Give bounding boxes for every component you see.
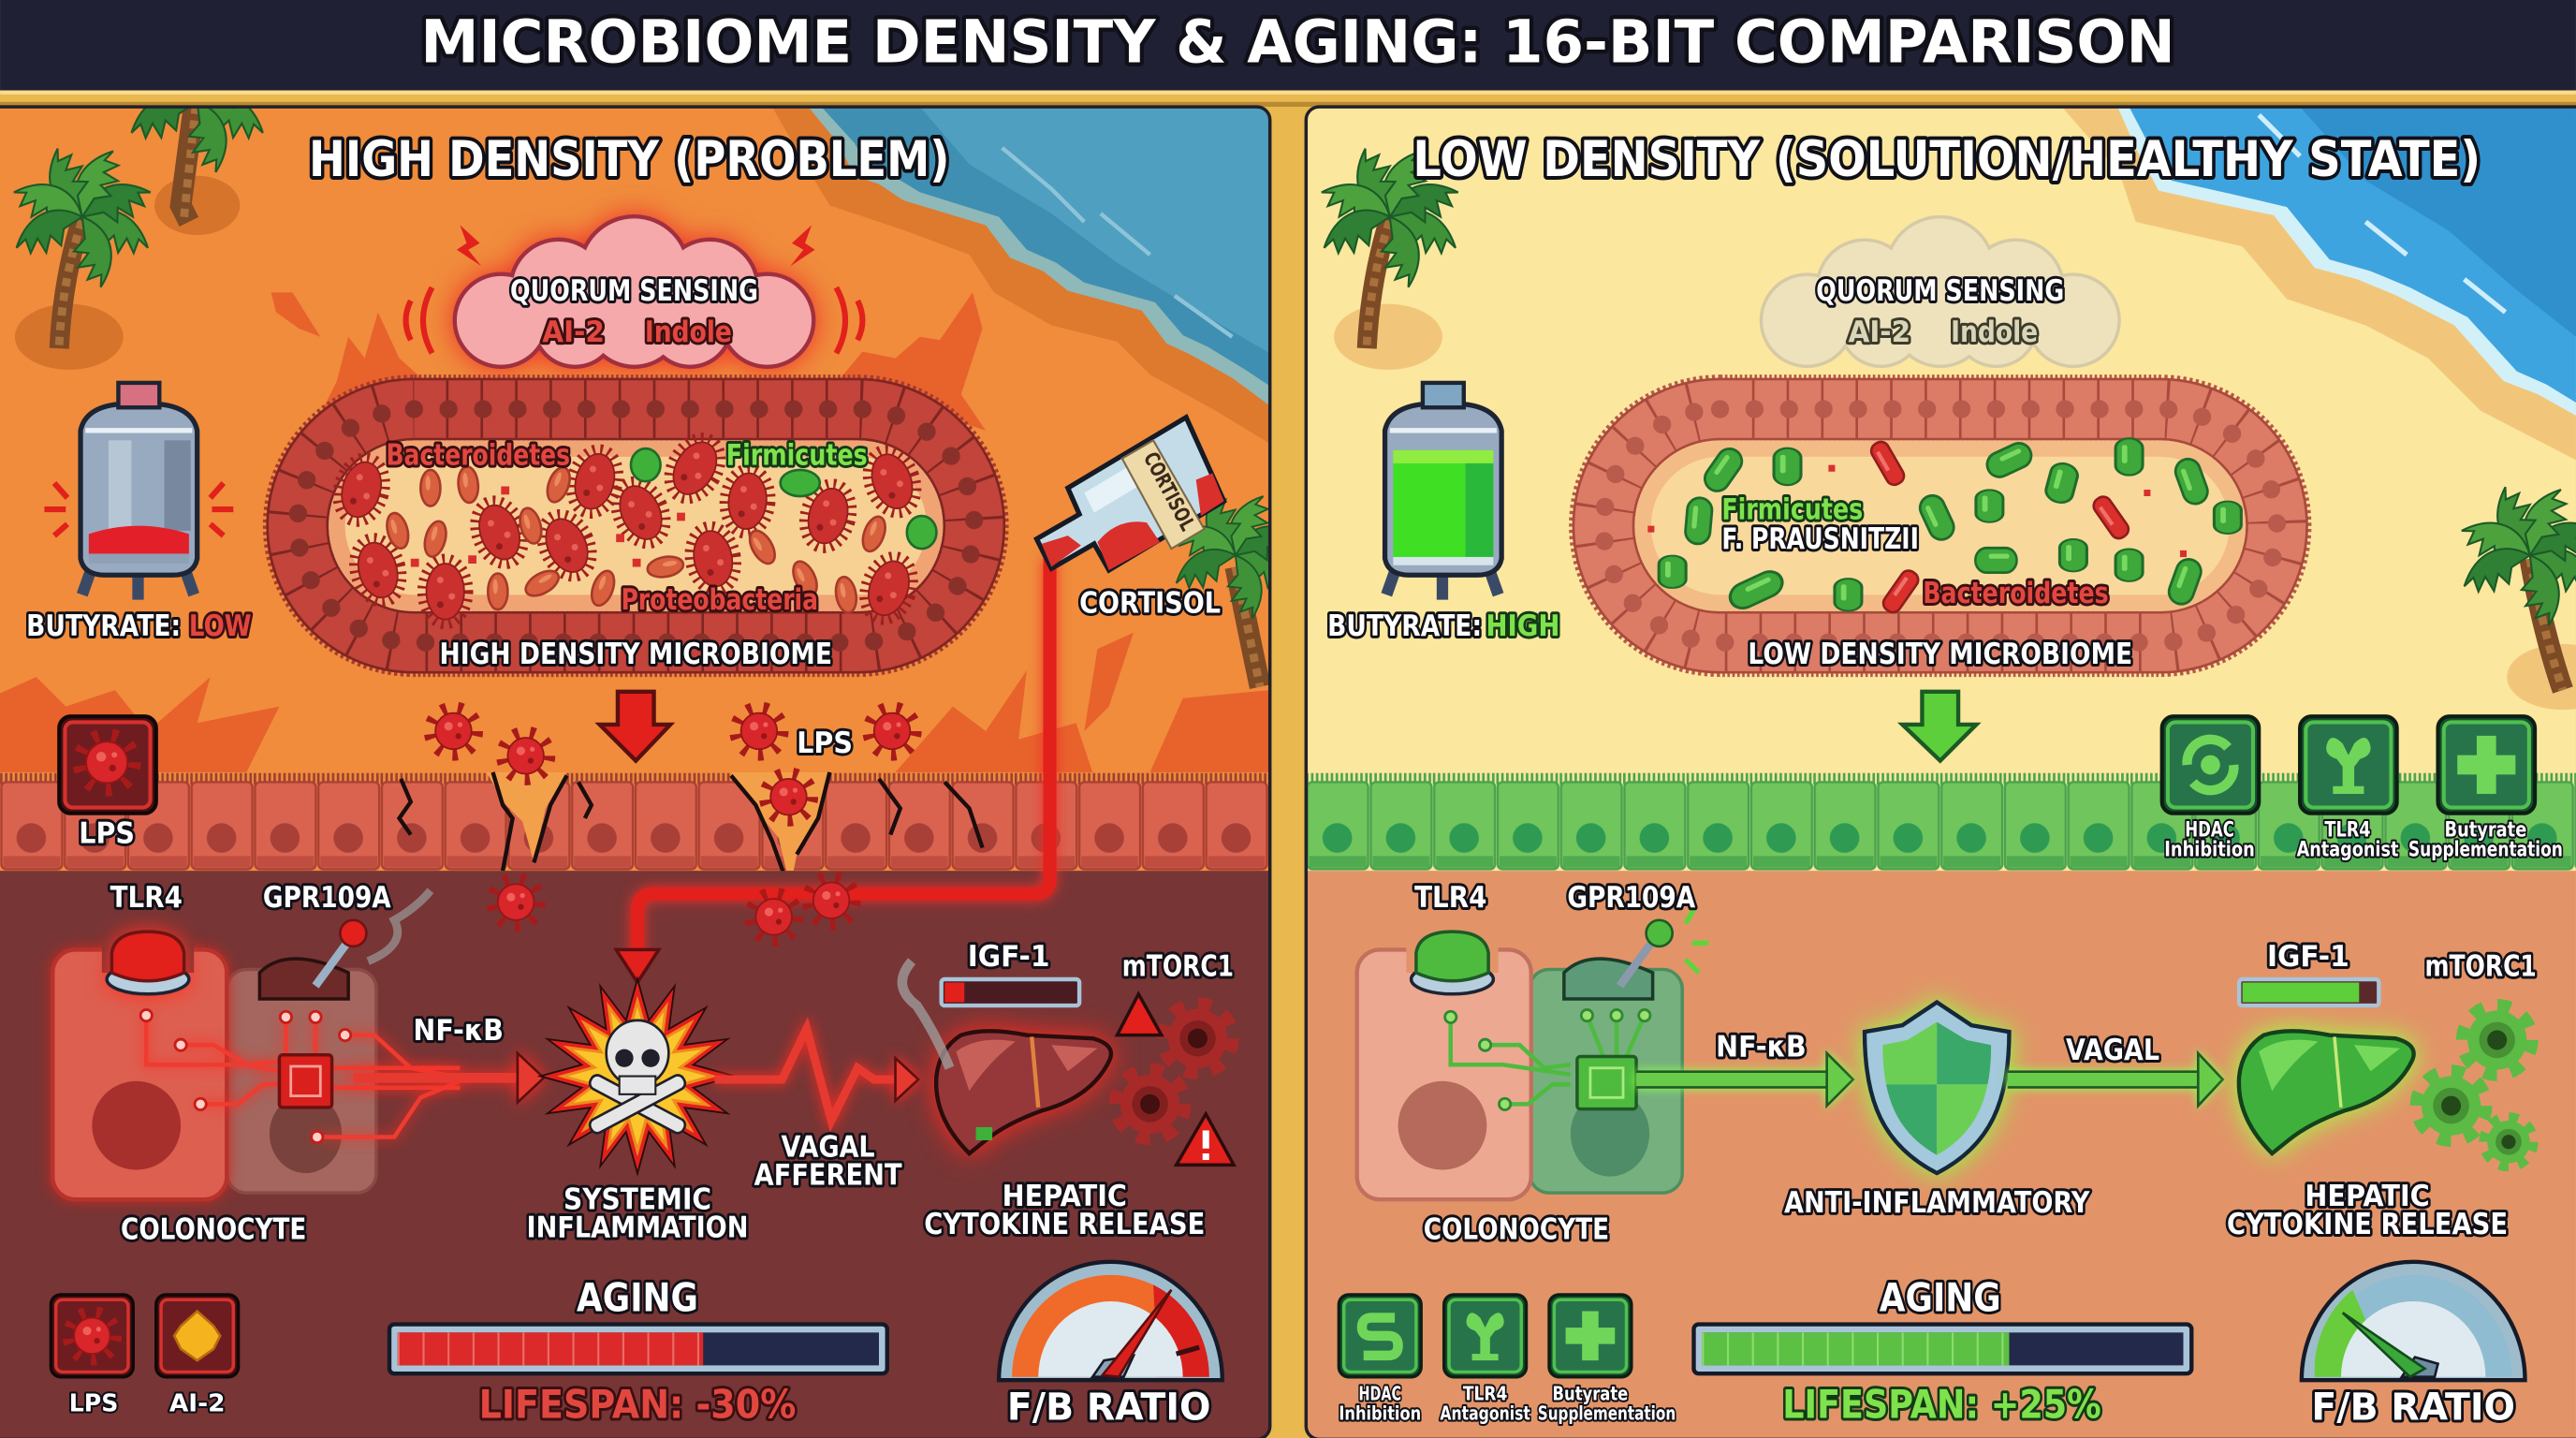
icon labels: Antagonist: [2297, 838, 2398, 861]
pipe arrow head: [616, 949, 659, 983]
icon labels: [2164, 818, 2563, 861]
cortisol pipe: [637, 559, 1050, 956]
hepatic label: CYTOKINE RELEASE: [924, 1208, 1205, 1241]
icon: tlr4: [1444, 1295, 1526, 1377]
quorum sensing cloud: AI-2: [542, 315, 605, 349]
quiet quorum sensing cloud: Indole: [1951, 315, 2038, 349]
peach tissue background: [1306, 871, 2576, 1438]
labels: TLR4: [110, 881, 183, 915]
explosion with skull: INFLAMMATION: [527, 1211, 748, 1245]
low density microbiome ring: Bacteroidetes: [1923, 577, 2109, 610]
vagal afferent label: [754, 1131, 902, 1192]
LPS icon box: [59, 716, 156, 850]
explosion with skull: SYSTEMIC: [564, 1183, 711, 1217]
signal circuits: [146, 1016, 460, 1137]
gpr109a lever: [1564, 907, 1708, 999]
panel title: HIGH DENSITY (PROBLEM): [309, 131, 949, 188]
signal arcs: [406, 287, 862, 353]
colonocyte pair: GPR109A: [263, 881, 391, 915]
gpr109a lever: [259, 920, 366, 999]
breach wedges: [487, 772, 567, 862]
sparse bacteria: [1647, 438, 2241, 615]
panel: low density (healthy): [1306, 107, 2576, 1438]
cortisol bottle: [1036, 418, 1224, 621]
tlr4 button: [1412, 932, 1493, 994]
cell: pink colonocyte: [1357, 949, 1531, 1199]
high density microbiome ring: Firmicutes: [726, 439, 868, 473]
icon labels: Butyrate: [2445, 818, 2526, 842]
icon: hdac: [1339, 1295, 1421, 1377]
bottom icons: lps and ai-2: AI-2: [169, 1389, 225, 1417]
hepatic label: [2227, 1180, 2508, 1241]
bacteria crowd: [331, 430, 936, 626]
aging bar: [1693, 1275, 2191, 1428]
lightning bolts: [457, 225, 815, 266]
cortisol bottle: CORTISOL: [1138, 448, 1199, 535]
liver smoke: [902, 961, 949, 1068]
vagal afferent pulse arrow: [714, 1029, 918, 1121]
icon labels: Inhibition: [1339, 1401, 1421, 1424]
hepatic label: [924, 1180, 1205, 1241]
igf-1 gauge: [2239, 940, 2378, 1005]
butyrate low label: [26, 610, 253, 638]
bacteria labels: Bacteroidetes: [386, 439, 570, 473]
nf-kb label: NF-κB: [413, 1014, 504, 1048]
aging bar: LIFESPAN: +25%: [1782, 1382, 2101, 1428]
title: MICROBIOME DENSITY & AGING: 16-BIT COMPARISON: [420, 7, 2175, 77]
healthy colonocyte pair: [1357, 881, 1708, 1246]
icon labels: Inhibition: [2164, 838, 2255, 861]
skull and crossbones: [588, 1020, 687, 1136]
vagal afferent label: VAGAL: [782, 1131, 875, 1165]
bacteria labels: Firmicutes: [1721, 493, 1863, 527]
bottom icons: lps and ai-2: [51, 1295, 239, 1417]
mtorc1 gears and warnings: [1116, 949, 1234, 1165]
nf-kb arrow: [353, 1053, 544, 1103]
title bar: [0, 0, 2576, 107]
palm tree lower right: [2455, 481, 2576, 710]
quorum sensing cloud: Indole: [645, 315, 732, 349]
butyrate tank low: [44, 383, 233, 600]
f/b ratio gauge: [999, 1262, 1222, 1429]
nf-kb arrow: [1636, 1053, 1853, 1106]
icon: hdac inhibition: [2162, 716, 2259, 814]
vagal label: VAGAL: [2066, 1034, 2159, 1067]
high density microbiome ring: [298, 409, 974, 671]
butyrate tank high: [1385, 383, 1501, 600]
aging bar: AGING: [1880, 1275, 2001, 1321]
palm tree behind bottle: [1168, 489, 1303, 687]
icon labels: Antagonist: [1440, 1401, 1530, 1424]
high density microbiome ring: Proteobacteria: [621, 583, 818, 617]
low density microbiome ring: [1603, 409, 2277, 671]
icon labels: TLR4: [1463, 1382, 1507, 1404]
LPS label: LPS: [797, 726, 853, 760]
signal chip: [279, 1055, 332, 1108]
mtorc1 gears and warnings: mTORC1: [1122, 949, 1234, 983]
butyrate low label: BUTYRATE:: [26, 609, 181, 643]
red down arrow: [600, 692, 670, 761]
quiet quorum sensing cloud: AI-2: [1848, 315, 1910, 349]
igf-1 gauge: IGF-1: [968, 940, 1050, 974]
icon: butyrate supplementation: [2438, 716, 2535, 814]
leaky gut membrane: [0, 771, 1268, 871]
icon: butyrate: [1549, 1295, 1632, 1377]
beach water: [772, 107, 1270, 444]
flame stains on sand: [0, 292, 1270, 772]
maroon tissue background: [0, 871, 1270, 1438]
hepatic label: HEPATIC: [2305, 1180, 2430, 1213]
therapy icons top: [2162, 716, 2563, 861]
icon labels: Supplementation: [1538, 1401, 1676, 1424]
explosion with skull: [527, 976, 748, 1245]
cloud text: QUORUM SENSING: [510, 274, 758, 308]
f/b ratio gauge: F/B RATIO: [1007, 1385, 1211, 1429]
butyrate high label: HIGH: [1486, 609, 1559, 643]
igf-1 gauge: [942, 940, 1079, 1005]
cell: gpr109a colonocyte: [227, 969, 376, 1193]
mtorc1 gears: mTORC1: [2424, 949, 2537, 983]
signal chip: [1577, 1056, 1636, 1109]
hepatic label: HEPATIC: [1003, 1180, 1127, 1213]
bottom icons: lps and ai-2: LPS: [69, 1389, 118, 1417]
cracks: [400, 772, 983, 888]
LPS entering blood: [751, 877, 855, 940]
cell: tlr4 colonocyte: [52, 949, 227, 1199]
mtorc1 gears: [2417, 949, 2537, 1167]
icon labels: TLR4: [2324, 818, 2371, 842]
icon labels: Butyrate: [1553, 1382, 1628, 1404]
vagal arrow: [2008, 1053, 2223, 1106]
LPS icon box: LPS: [79, 816, 135, 850]
f/b ratio gauge: F/B RATIO: [2311, 1385, 2515, 1429]
icon labels: HDAC: [1358, 1382, 1401, 1404]
aging bar: [389, 1275, 887, 1428]
healthy gut membrane: [1306, 772, 2576, 871]
healthy colonocyte pair: COLONOCYTE: [1424, 1212, 1609, 1246]
panel title: LOW DENSITY (SOLUTION/HEALTHY STATE): [1412, 131, 2481, 188]
ring label: LOW DENSITY MICROBIOME: [1748, 638, 2132, 671]
shield: ANTI-INFLAMMATORY: [1784, 1186, 2090, 1220]
bottom therapy icons: [1339, 1295, 1676, 1424]
hepatic label: CYTOKINE RELEASE: [2227, 1208, 2508, 1241]
inflamed liver: [936, 1031, 1111, 1153]
signal circuits: [1451, 1016, 1645, 1104]
healthy liver: [2239, 1031, 2414, 1153]
colonocyte pair: COLONOCYTE: [121, 1212, 306, 1246]
icon labels: HDAC: [2185, 818, 2234, 842]
icon: tlr4 antagonist: [2300, 716, 2397, 814]
LPS viruses: [431, 708, 915, 925]
shield: [1784, 1003, 2090, 1220]
tlr4 button: [107, 932, 189, 994]
labels: TLR4: [1414, 881, 1486, 915]
butyrate low label: LOW: [189, 609, 252, 643]
colonocyte pair: [52, 881, 460, 1246]
cortisol bottle: CORTISOL: [1079, 587, 1221, 621]
palm tree: [1315, 142, 1464, 370]
healthy colonocyte pair: GPR109A: [1567, 881, 1695, 915]
palm tree front: [7, 142, 156, 370]
cell: green colonocyte: [1530, 969, 1682, 1193]
green down arrow: [1902, 692, 1976, 761]
aging bar: AGING: [577, 1275, 698, 1321]
nf-kb label: NF-κB: [1716, 1030, 1807, 1064]
vagal afferent label: AFFERENT: [754, 1158, 902, 1192]
warning sparks: [44, 483, 233, 536]
f/b ratio gauge: [2302, 1262, 2525, 1429]
icon labels: [1339, 1382, 1676, 1424]
panel: high density (problem): [0, 27, 1303, 1438]
smoke: [368, 890, 431, 961]
ring label: HIGH DENSITY MICROBIOME: [440, 638, 832, 671]
low density microbiome ring: F. PRAUSNITZII: [1721, 522, 1919, 556]
aging bar: LIFESPAN: -30%: [479, 1382, 796, 1428]
butyrate high label: BUTYRATE:: [1327, 609, 1482, 643]
quorum sensing cloud: [406, 218, 862, 365]
beach water: [2062, 107, 2576, 460]
quiet quorum sensing cloud: QUORUM SENSING: [1816, 274, 2064, 308]
igf-1 gauge: IGF-1: [2267, 940, 2349, 974]
quiet quorum sensing cloud: [1763, 218, 2117, 365]
palm tree back: [131, 109, 264, 235]
